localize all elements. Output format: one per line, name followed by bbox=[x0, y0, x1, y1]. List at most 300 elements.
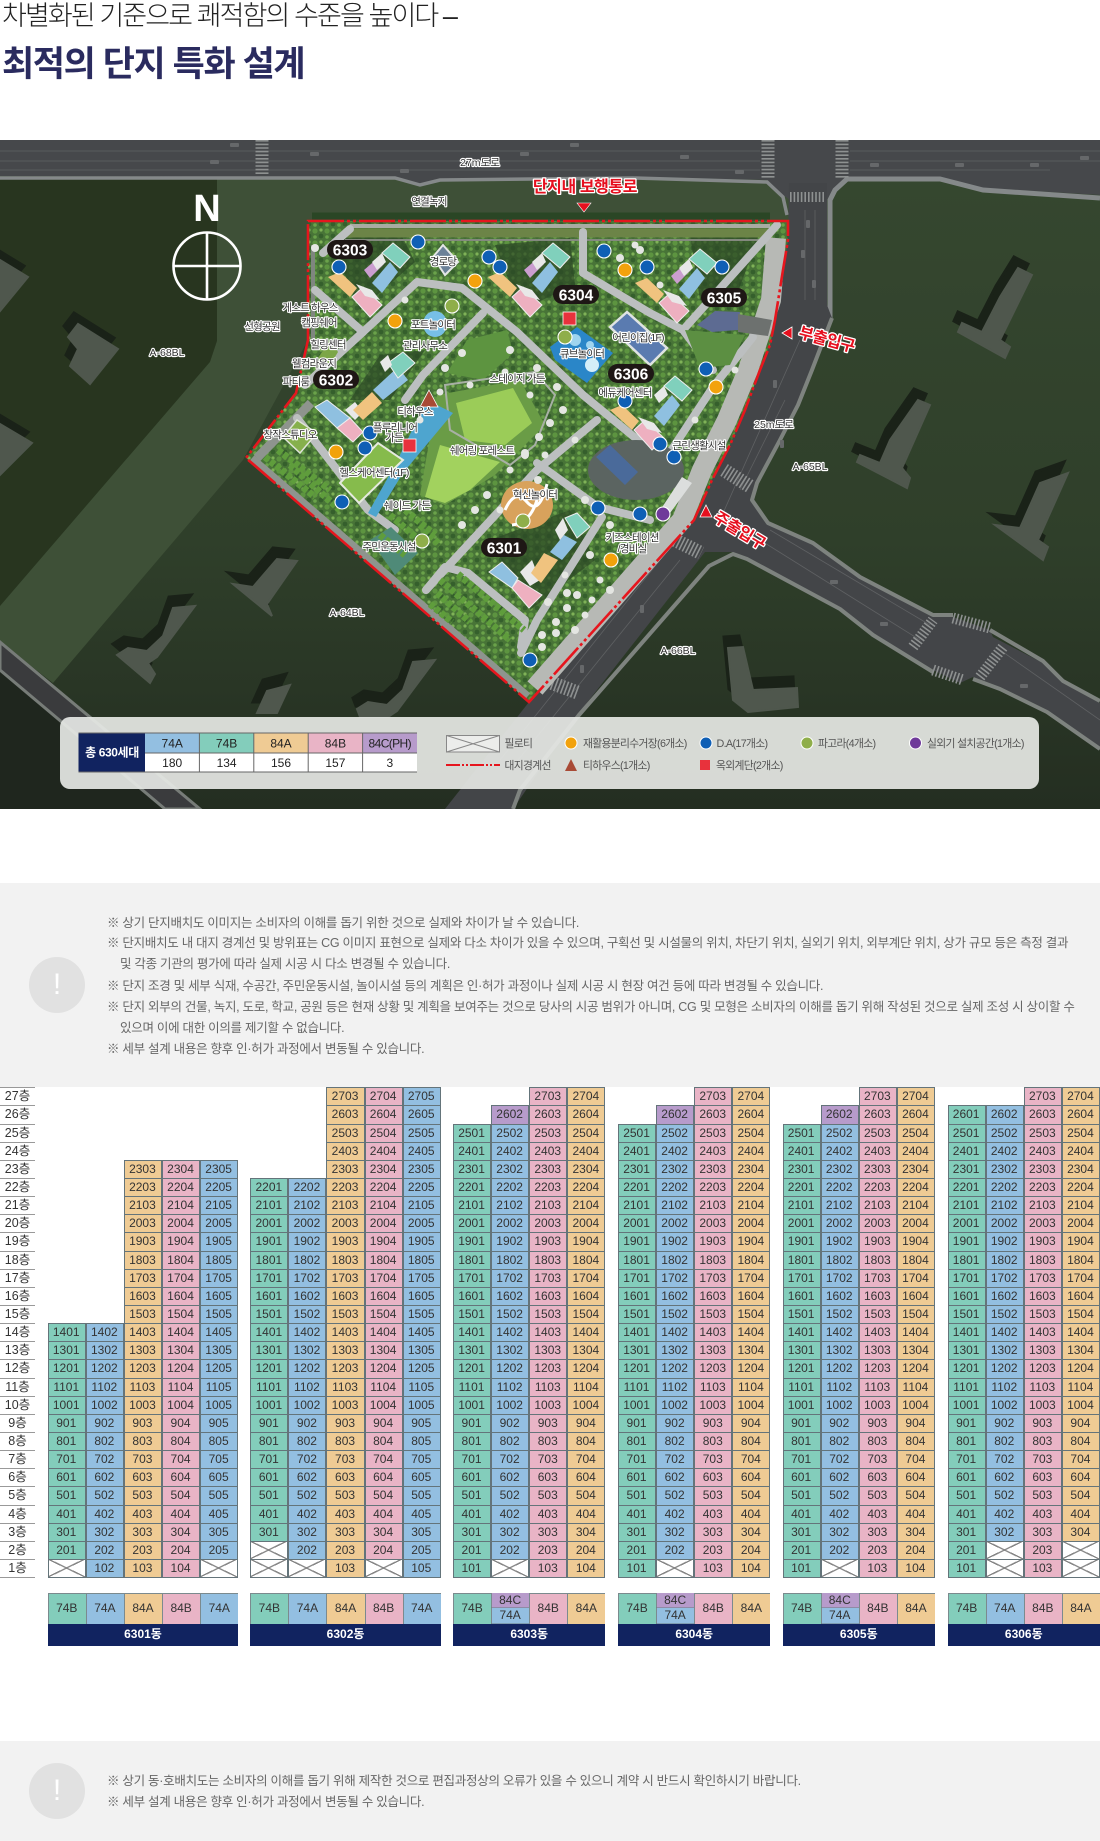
unit stack 6301: 805 bbox=[209, 1434, 229, 1448]
unit stack 6303: 903 bbox=[538, 1416, 558, 1430]
unit stack 6306: 904 bbox=[1070, 1416, 1090, 1430]
unit stack 6303: 2003 bbox=[534, 1216, 561, 1230]
unit stack 6306: 601 bbox=[956, 1470, 976, 1484]
unit stack 6301: 601 bbox=[56, 1470, 76, 1484]
unit stack 6302: 505 bbox=[411, 1488, 431, 1502]
unit stack 6301: 804 bbox=[171, 1434, 191, 1448]
unit stack 6302: 1705 bbox=[408, 1271, 435, 1285]
unit stack 6306: 1002 bbox=[991, 1398, 1018, 1412]
unit stack 6306: 2101 bbox=[953, 1198, 979, 1212]
unit stack 6303: 1601 bbox=[458, 1289, 485, 1303]
unit stack 6306: 1304 bbox=[1067, 1343, 1094, 1357]
unit stack 6301: 901 bbox=[56, 1416, 76, 1430]
unit stack 6306: 704 bbox=[1070, 1452, 1090, 1466]
unit stack 6305: 602 bbox=[829, 1470, 849, 1484]
unit stack 6303: 1001 bbox=[458, 1398, 485, 1412]
unit stack 6303: 1003 bbox=[534, 1398, 561, 1412]
unit stack 6304: 904 bbox=[741, 1416, 761, 1430]
port playground bbox=[423, 311, 447, 337]
unit stack 6302: 705 bbox=[411, 1452, 431, 1466]
unit stack 6301: 1105 bbox=[206, 1380, 232, 1394]
unit stack 6302: 601 bbox=[259, 1470, 279, 1484]
park lawn base bbox=[420, 380, 545, 505]
unit stack 6301: 704 bbox=[171, 1452, 191, 1466]
unit stack 6304: 1202 bbox=[661, 1361, 688, 1375]
unit stack 6304: 201 bbox=[627, 1543, 647, 1557]
unit stack 6303: 2402 bbox=[496, 1144, 523, 1158]
unit stack 6303: 902 bbox=[500, 1416, 520, 1430]
unit stack 6306: 2704 bbox=[1067, 1089, 1094, 1103]
unit stack 6306: 302 bbox=[994, 1525, 1014, 1539]
unit stack 6304: 2003 bbox=[699, 1216, 726, 1230]
unit stack 6303: 2604 bbox=[572, 1107, 599, 1121]
unit stack 6303: 2302 bbox=[496, 1162, 523, 1176]
unit stack 6303: 1901 bbox=[458, 1234, 485, 1248]
unit stack 6301: 2004 bbox=[167, 1216, 194, 1230]
unit stack 6302: 1404 bbox=[370, 1325, 396, 1339]
unit stack 6306: 1401 bbox=[953, 1325, 979, 1339]
unit types 6301 bbox=[48, 1593, 238, 1624]
unit stack 6305: 1503 bbox=[864, 1307, 891, 1321]
unit stack 6301: 201 bbox=[56, 1543, 76, 1557]
unit stack 6306: 501 bbox=[956, 1488, 976, 1502]
unit stack 6306: 201 bbox=[956, 1543, 976, 1557]
unit stack 6305: 601 bbox=[791, 1470, 811, 1484]
unit stack 6304: 2403 bbox=[699, 1144, 726, 1158]
map labels: 가든 bbox=[385, 432, 404, 444]
unit stack 6304: 1302 bbox=[661, 1343, 688, 1357]
unit stack 6305: 1404 bbox=[902, 1325, 929, 1339]
unit stack 6305: 1101 bbox=[788, 1380, 814, 1394]
unit stack 6303: 2301 bbox=[458, 1162, 485, 1176]
unit stack 6302: 1405 bbox=[408, 1325, 435, 1339]
unit stack 6305: 1104 bbox=[903, 1380, 928, 1394]
notes text: ※ 단지 조경 및 세부 식재, 수공간, 주민운동시설, 놀이시설 등의 계획은 인·허가 과정이나 실제 시공 시 현장 여건 등에 따라 변경될 수 있습니다. bbox=[107, 979, 823, 993]
unit stack 6302: 605 bbox=[411, 1470, 431, 1484]
unit stack 6306: 503 bbox=[1032, 1488, 1052, 1502]
unit stack 6301: 404 bbox=[171, 1507, 191, 1521]
unit stack 6302: 103 bbox=[335, 1561, 355, 1575]
site boundary red line bbox=[246, 221, 788, 702]
notes text: ※ 세부 설계 내용은 향후 인·허가 과정에서 변동될 수 있습니다. bbox=[107, 1795, 424, 1809]
unit stack 6305: 202 bbox=[829, 1543, 849, 1557]
unit stack 6306: 1701 bbox=[953, 1271, 979, 1285]
unit stack 6304: 2101 bbox=[623, 1198, 650, 1212]
notes text bbox=[107, 916, 1075, 1056]
unit stack 6303: 2102 bbox=[496, 1198, 523, 1212]
unit stack 6302: 2604 bbox=[370, 1107, 396, 1121]
unit stack 6305: 903 bbox=[867, 1416, 887, 1430]
unit stack 6301: 603 bbox=[132, 1470, 152, 1484]
unit stack 6303: 1801 bbox=[458, 1253, 485, 1267]
map labels: 경로당 bbox=[430, 255, 457, 268]
markers: outdoor stairs red bbox=[403, 312, 576, 452]
unit stack 6303: 304 bbox=[576, 1525, 596, 1539]
unit stack 6301: 602 bbox=[94, 1470, 114, 1484]
unit stack 6302: 1603 bbox=[332, 1289, 358, 1303]
unit stack 6301: 1504 bbox=[167, 1307, 194, 1321]
unit stack 6303: 1501 bbox=[458, 1307, 485, 1321]
unit stack 6302: 1001 bbox=[255, 1398, 282, 1412]
unit stack 6302: 2504 bbox=[370, 1126, 396, 1140]
unit stack 6304: 503 bbox=[703, 1488, 723, 1502]
unit stack 6304: 2103 bbox=[699, 1198, 726, 1212]
unit stack 6304: 304 bbox=[741, 1525, 761, 1539]
unit types 6305: 84B bbox=[867, 1601, 888, 1615]
unit stack 6301: 403 bbox=[132, 1507, 152, 1521]
unit stack 6303: 203 bbox=[538, 1543, 558, 1557]
unit stack 6304: 2302 bbox=[661, 1162, 688, 1176]
unit types 6305: 84A bbox=[905, 1601, 927, 1615]
unit stack 6301: 2103 bbox=[129, 1198, 156, 1212]
unit stack 6303: 2502 bbox=[496, 1126, 523, 1140]
unit stack 6305: 901 bbox=[791, 1416, 811, 1430]
unit stack 6302: 1905 bbox=[408, 1234, 435, 1248]
unit stack 6302: 802 bbox=[297, 1434, 317, 1448]
unit stack 6302: 2203 bbox=[332, 1180, 358, 1194]
unit stack 6302: 1202 bbox=[294, 1361, 320, 1375]
legend: tea house bbox=[565, 758, 650, 772]
unit stack 6304: 1702 bbox=[661, 1271, 688, 1285]
unit stack 6301: 1301 bbox=[53, 1343, 80, 1357]
unit stack 6302: 1102 bbox=[294, 1380, 320, 1394]
building number labels: 6302 bbox=[319, 372, 353, 390]
unit stack 6306: 1101 bbox=[953, 1380, 979, 1394]
unit stack 6301: 1202 bbox=[91, 1361, 118, 1375]
unit stack 6301 bbox=[48, 1160, 238, 1578]
unit stack 6305: 1102 bbox=[826, 1380, 852, 1394]
unit stack 6304: 803 bbox=[703, 1434, 723, 1448]
unit stack 6306: 2302 bbox=[991, 1162, 1018, 1176]
unit stack 6305: 1001 bbox=[788, 1398, 814, 1412]
site area bbox=[246, 216, 788, 702]
floor axis labels: 17층 bbox=[5, 1271, 30, 1285]
unit stack 6306: 1003 bbox=[1029, 1398, 1056, 1412]
unit stack 6306: 1102 bbox=[991, 1380, 1017, 1394]
unit stack 6306: 1504 bbox=[1067, 1307, 1094, 1321]
unit stack 6303: 501 bbox=[462, 1488, 482, 1502]
unit stack 6306: 2003 bbox=[1029, 1216, 1056, 1230]
unit stack 6304: 1704 bbox=[737, 1271, 764, 1285]
unit stack 6302: 1004 bbox=[370, 1398, 396, 1412]
floor axis labels: 11층 bbox=[5, 1380, 30, 1394]
unit stack 6305: 1002 bbox=[826, 1398, 853, 1412]
unit stack 6301: 2104 bbox=[167, 1198, 194, 1212]
unit stack 6304: 1903 bbox=[699, 1234, 726, 1248]
unit stack 6304: 2002 bbox=[661, 1216, 688, 1230]
unit stack 6302: 1002 bbox=[294, 1398, 320, 1412]
map labels: 스테이지 가든 bbox=[489, 373, 546, 385]
map labels: 주민운동시설 bbox=[362, 541, 416, 553]
unit stack 6302: 2003 bbox=[332, 1216, 358, 1230]
unit stack 6301: 204 bbox=[171, 1543, 191, 1557]
unit stack 6302: 1505 bbox=[408, 1307, 435, 1321]
unit stack 6305: 2304 bbox=[902, 1162, 929, 1176]
unit stack 6303: 603 bbox=[538, 1470, 558, 1484]
legend: outdoor unit: 실외기 설치공간(1개소) bbox=[927, 737, 1024, 750]
water channel bbox=[368, 400, 453, 517]
unit stack 6302: 2101 bbox=[255, 1198, 282, 1212]
unit stack 6301: 701 bbox=[56, 1452, 76, 1466]
panel: site plan map bbox=[0, 140, 1100, 809]
dong label 6305: 6305동 bbox=[840, 1627, 878, 1641]
unit stack 6306: 901 bbox=[956, 1416, 976, 1430]
floor axis labels: 26층 bbox=[5, 1107, 30, 1121]
unit stack 6305: 304 bbox=[905, 1525, 925, 1539]
unit stack 6306: 2301 bbox=[953, 1162, 979, 1176]
unit stack 6306: 1501 bbox=[953, 1307, 979, 1321]
unit stack 6305: 2301 bbox=[788, 1162, 814, 1176]
unit stack 6305: 1303 bbox=[864, 1343, 891, 1357]
unit stack 6302: 2704 bbox=[370, 1089, 396, 1103]
unit stack 6304: 303 bbox=[703, 1525, 723, 1539]
unit stack 6305: 2002 bbox=[826, 1216, 853, 1230]
unit stack 6306: 2604 bbox=[1067, 1107, 1094, 1121]
unit stack 6301: 405 bbox=[209, 1507, 229, 1521]
legend unit table: 3 bbox=[386, 756, 393, 770]
unit stack 6304: 802 bbox=[665, 1434, 685, 1448]
unit stack 6305: 2502 bbox=[826, 1126, 853, 1140]
unit stack 6306: 802 bbox=[994, 1434, 1014, 1448]
unit stack 6306: 803 bbox=[1032, 1434, 1052, 1448]
unit stack 6305: 502 bbox=[829, 1488, 849, 1502]
unit stack 6301: 904 bbox=[171, 1416, 191, 1430]
unit stack 6301: 1103 bbox=[130, 1380, 155, 1394]
map labels: 포트놀이터 bbox=[411, 319, 455, 331]
unit stack 6302: 903 bbox=[335, 1416, 355, 1430]
unit stack 6305 bbox=[783, 1087, 935, 1578]
unit stack 6302: 1802 bbox=[294, 1253, 320, 1267]
floor axis labels: 22층 bbox=[5, 1180, 30, 1194]
map labels: A-66BL bbox=[660, 645, 696, 657]
unit stack 6302: 1501 bbox=[255, 1307, 282, 1321]
unit stack 6301: 202 bbox=[94, 1543, 114, 1557]
notes text: 있으며 이에 대한 이의를 제기할 수 없습니다. bbox=[120, 1021, 344, 1035]
unit stack 6301: 1503 bbox=[129, 1307, 156, 1321]
unit stack 6301: 505 bbox=[209, 1488, 229, 1502]
unit stack 6303: 702 bbox=[500, 1452, 520, 1466]
unit stack 6306: 1503 bbox=[1029, 1307, 1056, 1321]
innovation playground bbox=[501, 481, 553, 529]
unit stack 6305: 1804 bbox=[902, 1253, 929, 1267]
unit stack 6305: 702 bbox=[829, 1452, 849, 1466]
unit stack 6304: 101 bbox=[627, 1561, 647, 1575]
unit stack 6302: 1403 bbox=[332, 1325, 358, 1339]
unit stack 6304: 1401 bbox=[623, 1325, 650, 1339]
unit stack 6304: 603 bbox=[703, 1470, 723, 1484]
unit stack 6302: 203 bbox=[335, 1543, 355, 1557]
unit stack 6305: 603 bbox=[867, 1470, 887, 1484]
unit stack 6302: 2002 bbox=[294, 1216, 320, 1230]
unit stack 6303: 2504 bbox=[572, 1126, 599, 1140]
building number labels: 6301 bbox=[487, 540, 522, 558]
unit stack 6302: 2204 bbox=[370, 1180, 396, 1194]
health care centre green roof bbox=[340, 443, 403, 503]
unit stack 6301: 402 bbox=[94, 1507, 114, 1521]
unit types 6302: 74A bbox=[297, 1601, 318, 1615]
unit stack 6303: 701 bbox=[462, 1452, 482, 1466]
unit stack 6305: 201 bbox=[791, 1543, 811, 1557]
dong label 6301 bbox=[48, 1624, 238, 1646]
unit stack 6306: 2601 bbox=[953, 1107, 979, 1121]
unit stack 6304: 1803 bbox=[699, 1253, 726, 1267]
unit stack 6302: 2605 bbox=[408, 1107, 435, 1121]
unit types 6303: 74A bbox=[499, 1608, 521, 1622]
unit stack 6303: 1603 bbox=[534, 1289, 561, 1303]
unit stack 6301: 1002 bbox=[91, 1398, 118, 1412]
map labels: 큐브놀이터 bbox=[560, 348, 604, 360]
unit stack 6303: 201 bbox=[462, 1543, 482, 1557]
floor axis labels: 7층 bbox=[8, 1452, 27, 1466]
unit stack 6301: 2304 bbox=[167, 1162, 194, 1176]
map labels: 헬스케어센터(1F) bbox=[339, 467, 409, 479]
unit stack 6302: 2202 bbox=[294, 1180, 320, 1194]
unit stack 6304: 903 bbox=[703, 1416, 723, 1430]
floor axis labels: 14층 bbox=[5, 1325, 30, 1339]
unit stack 6305: 2403 bbox=[864, 1144, 891, 1158]
unit stack 6302: 2305 bbox=[408, 1162, 435, 1176]
unit stack 6304: 2504 bbox=[737, 1126, 764, 1140]
building 6304 bbox=[488, 243, 570, 317]
unit stack 6301: 2203 bbox=[129, 1180, 156, 1194]
unit stack 6303: 1401 bbox=[458, 1325, 485, 1339]
unit stack 6303: 1804 bbox=[572, 1253, 599, 1267]
unit stack 6303: 2201 bbox=[458, 1180, 485, 1194]
unit stack 6304: 1802 bbox=[661, 1253, 688, 1267]
east paved walkway bbox=[535, 238, 776, 688]
unit stack 6306: 1601 bbox=[953, 1289, 979, 1303]
unit stack 6302: 1105 bbox=[408, 1380, 434, 1394]
unit stack 6302: 204 bbox=[373, 1543, 393, 1557]
unit stack 6303: 1802 bbox=[496, 1253, 523, 1267]
unit stack 6306: 2102 bbox=[991, 1198, 1018, 1212]
unit stack 6302: 603 bbox=[335, 1470, 355, 1484]
unit stack 6304: 2202 bbox=[661, 1180, 688, 1194]
unit stack 6304: 1504 bbox=[737, 1307, 764, 1321]
unit stack 6301: 2105 bbox=[205, 1198, 232, 1212]
callout: pedestrian passage bbox=[533, 177, 638, 212]
unit stack 6303: 204 bbox=[576, 1543, 596, 1557]
unit stack 6301: 1804 bbox=[167, 1253, 194, 1267]
legend: tea house: 티하우스(1개소) bbox=[583, 758, 650, 772]
unit stack 6303: 502 bbox=[500, 1488, 520, 1502]
unit stack 6304: 1403 bbox=[699, 1325, 726, 1339]
unit stack 6304: 902 bbox=[665, 1416, 685, 1430]
building 6303 bbox=[328, 243, 410, 317]
unit stack 6302: 1903 bbox=[332, 1234, 358, 1248]
unit types 6303: 84A bbox=[576, 1601, 597, 1615]
unit stack 6305: 1202 bbox=[826, 1361, 853, 1375]
unit stack 6306: 703 bbox=[1032, 1452, 1052, 1466]
unit stack 6306: 1403 bbox=[1029, 1325, 1056, 1339]
unit stack 6305: 2603 bbox=[864, 1107, 891, 1121]
unit stack 6302: 1701 bbox=[255, 1271, 282, 1285]
unit stack 6303: 503 bbox=[538, 1488, 558, 1502]
unit stack 6304: 1101 bbox=[624, 1380, 649, 1394]
unit stack 6306: 2001 bbox=[953, 1216, 979, 1230]
unit stack 6301: 1604 bbox=[167, 1289, 194, 1303]
unit stack 6302: 1801 bbox=[255, 1253, 282, 1267]
unit stack 6304: 702 bbox=[665, 1452, 685, 1466]
unit stack 6301: 1904 bbox=[167, 1234, 194, 1248]
unit stack 6306: 2103 bbox=[1029, 1198, 1056, 1212]
roads bbox=[0, 140, 1100, 809]
unit stack 6301: 1203 bbox=[129, 1361, 156, 1375]
unit stack 6303: 2603 bbox=[534, 1107, 561, 1121]
unit stack 6305: 2404 bbox=[902, 1144, 929, 1158]
unit stack 6303: 2202 bbox=[496, 1180, 523, 1194]
unit stack 6305: 402 bbox=[829, 1507, 849, 1521]
legend: boundary line: 대지경계선 bbox=[504, 759, 551, 772]
unit types 6302: 84A bbox=[335, 1601, 356, 1615]
marker: outdoor unit purple bbox=[656, 507, 670, 521]
unit stack 6305: 2102 bbox=[826, 1198, 853, 1212]
map labels: A-68BL bbox=[149, 347, 185, 359]
unit stack 6301: 702 bbox=[94, 1452, 114, 1466]
unit stack 6301: 301 bbox=[56, 1525, 76, 1539]
unit stack 6302: 1203 bbox=[332, 1361, 358, 1375]
floor axis labels: 25층 bbox=[5, 1126, 30, 1140]
unit stack 6302: 2705 bbox=[408, 1089, 435, 1103]
unit stack 6303: 704 bbox=[576, 1452, 596, 1466]
unit stack 6303: 1704 bbox=[572, 1271, 599, 1285]
unit stack 6302: 205 bbox=[411, 1543, 431, 1557]
unit stack 6301: 1402 bbox=[91, 1325, 118, 1339]
unit stack 6305: 2003 bbox=[864, 1216, 891, 1230]
unit stack 6301: 2005 bbox=[205, 1216, 232, 1230]
unit stack 6306: 1201 bbox=[953, 1361, 979, 1375]
unit stack 6301: 902 bbox=[94, 1416, 114, 1430]
unit stack 6302: 703 bbox=[335, 1452, 355, 1466]
unit stack 6301: 1401 bbox=[53, 1325, 80, 1339]
unit stack 6303: 802 bbox=[500, 1434, 520, 1448]
unit stack 6302: 2303 bbox=[332, 1162, 358, 1176]
unit stack 6301: 903 bbox=[132, 1416, 152, 1430]
unit types 6304: 74A bbox=[664, 1608, 686, 1622]
unit stack 6306: 2501 bbox=[953, 1126, 979, 1140]
unit stack 6305: 403 bbox=[867, 1507, 887, 1521]
unit stack 6302: 904 bbox=[373, 1416, 393, 1430]
unit stack 6303: 2203 bbox=[534, 1180, 561, 1194]
unit stack 6302: 803 bbox=[335, 1434, 355, 1448]
unit stack 6304: 1603 bbox=[699, 1289, 726, 1303]
unit stack 6305: 1203 bbox=[864, 1361, 891, 1375]
unit stack 6305: 1902 bbox=[826, 1234, 853, 1248]
panel: site plan notes bbox=[0, 883, 1100, 1087]
unit stack 6306: 2503 bbox=[1029, 1126, 1056, 1140]
unit stack 6304: 504 bbox=[741, 1488, 761, 1502]
floor axis labels: 21층 bbox=[5, 1198, 30, 1212]
unit stack 6305: 104 bbox=[905, 1561, 925, 1575]
unit stack 6303: 1404 bbox=[572, 1325, 599, 1339]
unit stack 6301: 1205 bbox=[205, 1361, 232, 1375]
senior centre roof bbox=[433, 245, 458, 275]
floor axis labels: 16층 bbox=[5, 1289, 30, 1303]
unit stack 6305: 2504 bbox=[902, 1126, 929, 1140]
unit stack 6302: 403 bbox=[335, 1507, 355, 1521]
unit stack 6303: 602 bbox=[500, 1470, 520, 1484]
building 6303 unit plan bbox=[453, 1087, 605, 1646]
unit stack 6305: 503 bbox=[867, 1488, 887, 1502]
map labels: 연결녹지 bbox=[411, 196, 447, 208]
unit stack 6301: 2205 bbox=[205, 1180, 232, 1194]
unit stack 6303: 2304 bbox=[572, 1162, 599, 1176]
unit stack 6305: 1302 bbox=[826, 1343, 853, 1357]
unit types 6305: 74A bbox=[829, 1608, 850, 1622]
unit stack 6306: 1901 bbox=[953, 1234, 979, 1248]
unit stack 6304: 1404 bbox=[737, 1325, 764, 1339]
unit stack 6303: 303 bbox=[538, 1525, 558, 1539]
